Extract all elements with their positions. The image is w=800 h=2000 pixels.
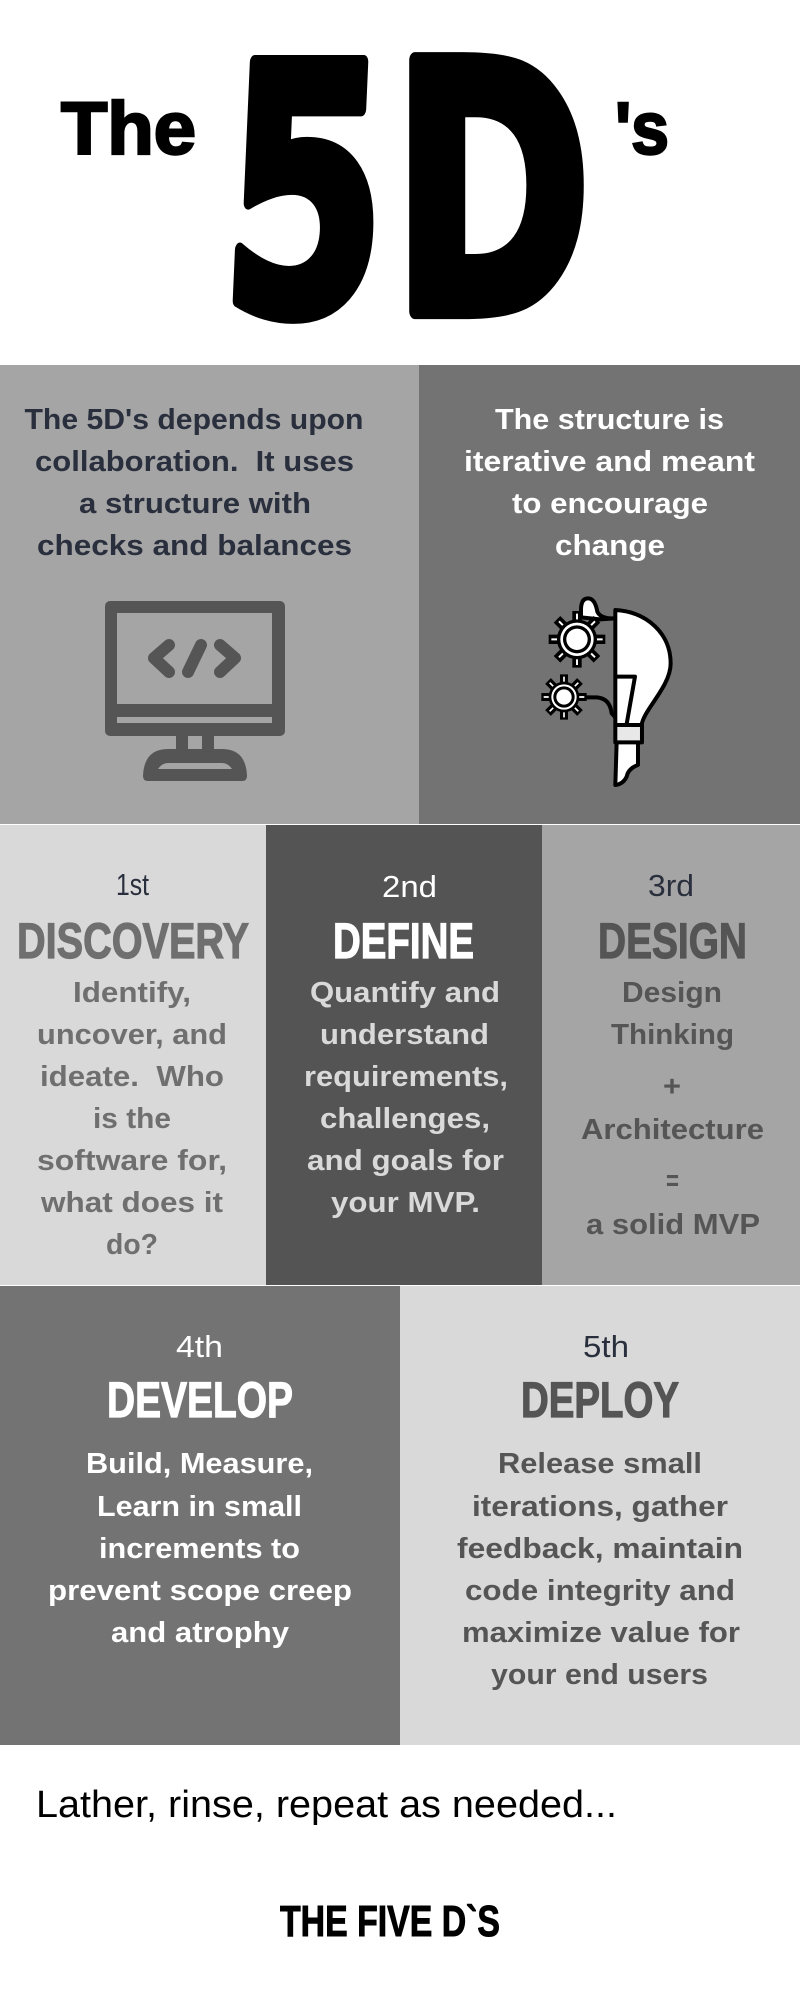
text: define description: Quantify and — [310, 977, 500, 1009]
text: design description: Architecture — [581, 1114, 764, 1146]
text: design description: a solid MVP — [586, 1209, 760, 1241]
panel: 1st Discovery — [0, 825, 266, 1285]
heading: DEVELOP: DEVELOP — [107, 1372, 293, 1428]
panel: collaboration — [0, 365, 419, 824]
panel: 2nd Define — [266, 825, 542, 1285]
text: deploy description: maximize value for — [462, 1617, 740, 1649]
text: iterative statement: to encourage — [512, 488, 708, 520]
title: The 5D's — [61, 0, 669, 394]
label: 2nd: 2nd — [382, 869, 437, 904]
text: design description: Design — [622, 977, 722, 1009]
text: discovery description: is the — [93, 1103, 171, 1135]
text: collaboration statement: a structure with — [79, 488, 311, 520]
text: define description: understand — [320, 1019, 489, 1051]
title: The 5D's: The — [61, 87, 196, 170]
heading: DESIGN: DESIGN — [598, 913, 747, 969]
text: design description: = — [666, 1165, 679, 1197]
text: deploy description: iterations, gather — [472, 1491, 728, 1523]
text: design description: + — [663, 1071, 681, 1103]
text: develop description — [48, 1448, 352, 1649]
text: discovery description: ideate. Who — [40, 1061, 224, 1093]
text: define description: requirements, — [304, 1061, 508, 1093]
text: discovery description: do? — [106, 1229, 158, 1261]
text: develop description: Learn in small — [97, 1491, 302, 1523]
label: 1st: 1st — [116, 867, 149, 902]
label: 5th: 5th — [583, 1329, 629, 1364]
text: define description: and goals for — [307, 1145, 504, 1177]
text: discovery description: uncover, and — [37, 1019, 227, 1051]
text: collaboration statement — [24, 404, 364, 562]
text: lather, rinse, repeat: Lather, rinse, repeat as needed... — [36, 1784, 617, 1826]
panel: 5th Deploy — [400, 1286, 800, 1745]
text: define description: your MVP. — [331, 1187, 480, 1219]
text: define description — [304, 977, 508, 1219]
title: The 5D's: 's — [615, 87, 669, 170]
icon: half lightbulb with gears — [541, 598, 671, 785]
text: deploy description: Release small — [498, 1448, 702, 1480]
heading: DISCOVERY: DISCOVERY — [17, 913, 249, 969]
icon: computer monitor with code — [105, 601, 285, 781]
text: deploy description — [457, 1448, 743, 1691]
text: collaboration statement: The 5D's depends upon — [24, 404, 364, 436]
text: discovery description: what does it — [40, 1187, 223, 1219]
text: define description: challenges, — [320, 1103, 490, 1135]
panel: 4th Develop — [0, 1286, 400, 1745]
text: develop description: increments to — [99, 1533, 300, 1565]
text: develop description: and atrophy — [111, 1617, 289, 1649]
heading: DEFINE: DEFINE — [333, 913, 474, 969]
text: iterative statement — [464, 404, 755, 562]
text: iterative statement: The structure is — [495, 404, 724, 436]
heading: DEPLOY: DEPLOY — [521, 1372, 679, 1428]
text: collaboration statement: collaboration. It uses — [35, 446, 354, 478]
title: The 5D's: D — [393, 0, 591, 392]
panel: 3rd Design — [542, 825, 800, 1285]
label: 4th: 4th — [176, 1329, 223, 1364]
text: develop description: prevent scope creep — [48, 1575, 352, 1607]
text: iterative statement: iterative and meant — [464, 446, 755, 478]
text: deploy description: code integrity and — [465, 1575, 735, 1607]
text: discovery description: software for, — [37, 1145, 227, 1177]
text: iterative statement: change — [555, 530, 665, 562]
text: discovery description — [37, 977, 227, 1261]
panel: iterative structure — [419, 365, 800, 824]
title: The 5D's: 5 — [215, 0, 395, 394]
text: deploy description: feedback, maintain — [457, 1533, 743, 1565]
text: discovery description: Identify, — [73, 977, 191, 1009]
text: design description: Thinking — [611, 1019, 734, 1051]
text: collaboration statement: checks and balances — [37, 530, 352, 562]
text: develop description: Build, Measure, — [86, 1448, 313, 1480]
text: design description — [581, 977, 764, 1241]
label: 3rd: 3rd — [648, 868, 694, 903]
footer heading: THE FIVE D`S: THE FIVE D`S — [280, 1897, 500, 1946]
text: deploy description: your end users — [491, 1659, 708, 1691]
